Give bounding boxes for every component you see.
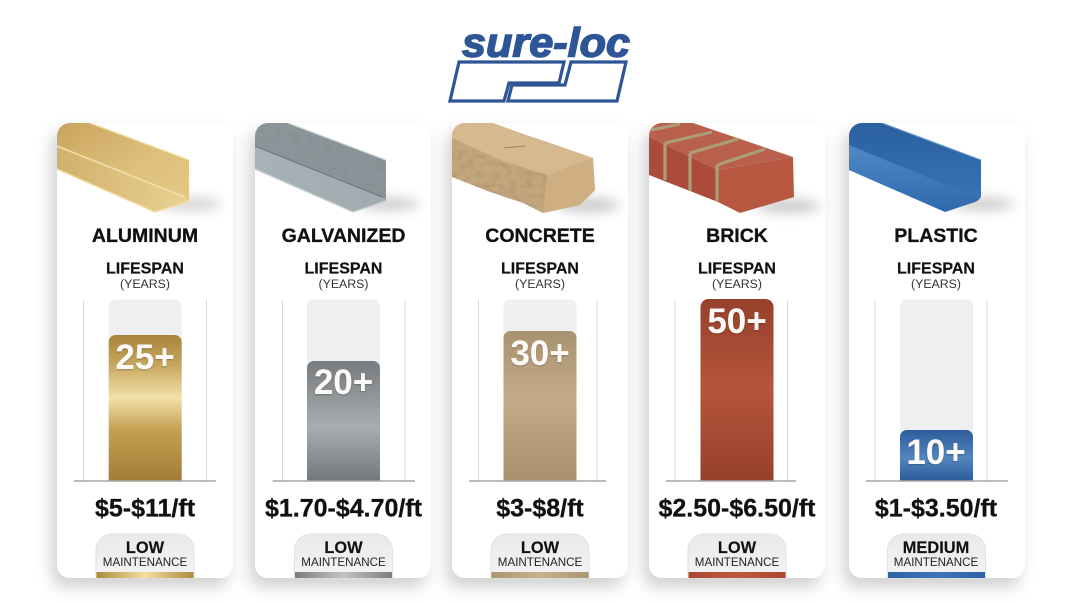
price: $1-$3.50/ft bbox=[875, 494, 998, 522]
maintenance badge: MAINTENANCE bbox=[103, 556, 187, 569]
maintenance badge: MAINTENANCE bbox=[695, 556, 779, 569]
price: $2.50-$6.50/ft bbox=[658, 494, 816, 522]
price: $5-$11/ft bbox=[95, 494, 196, 522]
maintenance badge: MAINTENANCE bbox=[498, 556, 582, 569]
maintenance badge: MAINTENANCE bbox=[301, 556, 386, 569]
lifespan label: LIFESPAN bbox=[501, 260, 579, 278]
logo wordmark: sure-loc bbox=[462, 20, 630, 66]
material name: GALVANIZED bbox=[282, 225, 405, 247]
maintenance badge: MAINTENANCE bbox=[894, 556, 978, 569]
bar chart: 30+ years: 30+ bbox=[510, 334, 570, 373]
lifespan label: (YEARS) bbox=[319, 277, 368, 291]
bar chart: 20+ years bbox=[272, 300, 415, 481]
card background bbox=[57, 123, 233, 578]
maintenance badge bbox=[491, 534, 589, 578]
lifespan label bbox=[305, 260, 382, 291]
lifespan label: (YEARS) bbox=[515, 277, 565, 291]
lifespan label bbox=[897, 260, 975, 291]
material name: PLASTIC bbox=[894, 225, 978, 247]
price: $1.70-$4.70/ft bbox=[265, 494, 423, 522]
card background bbox=[452, 123, 628, 578]
bar chart: 10+ years bbox=[866, 300, 1008, 481]
icon: aluminum angle bbox=[57, 123, 222, 212]
panel: plastic bbox=[849, 123, 1025, 578]
maintenance badge bbox=[888, 534, 986, 578]
logo: sure-loc bbox=[450, 20, 630, 101]
maintenance badge: LOW bbox=[126, 539, 165, 557]
panel: brick bbox=[649, 123, 825, 578]
material name: ALUMINUM bbox=[92, 225, 198, 247]
lifespan label: LIFESPAN bbox=[698, 260, 776, 278]
lifespan label: LIFESPAN bbox=[305, 260, 382, 278]
bar chart: 25+ years bbox=[74, 300, 216, 481]
bar chart: 50+ years bbox=[666, 299, 796, 481]
logo mark bbox=[450, 62, 626, 101]
lifespan label: (YEARS) bbox=[120, 277, 170, 291]
icon: concrete block bbox=[452, 123, 620, 213]
material name: BRICK bbox=[706, 225, 768, 247]
bar chart: 25+ years: 25+ bbox=[115, 338, 175, 377]
lifespan label: LIFESPAN bbox=[106, 260, 184, 278]
bar chart: 50+ years: 50+ bbox=[707, 302, 767, 341]
icon: plastic angle bbox=[849, 123, 1015, 212]
maintenance badge bbox=[688, 534, 786, 578]
price: $3-$8/ft bbox=[496, 494, 584, 522]
panel: aluminum bbox=[57, 123, 233, 578]
maintenance badge bbox=[96, 534, 194, 578]
lifespan label bbox=[106, 260, 184, 291]
panel: galvanized bbox=[255, 123, 431, 578]
maintenance badge: LOW bbox=[324, 539, 363, 557]
material name: CONCRETE bbox=[485, 225, 595, 247]
lifespan label bbox=[501, 260, 579, 291]
icon: galvanized angle bbox=[255, 123, 420, 212]
lifespan label: (YEARS) bbox=[911, 277, 961, 291]
icon: brick bbox=[649, 123, 820, 213]
lifespan label: LIFESPAN bbox=[897, 260, 975, 278]
bar chart: 30+ years bbox=[469, 300, 606, 481]
card background bbox=[649, 123, 825, 578]
maintenance badge: MEDIUM bbox=[903, 539, 969, 557]
bar chart: 20+ years: 20+ bbox=[314, 363, 373, 402]
lifespan label bbox=[698, 260, 776, 291]
card background bbox=[255, 123, 431, 578]
card background bbox=[849, 123, 1025, 578]
lifespan label: (YEARS) bbox=[712, 277, 762, 291]
maintenance badge: LOW bbox=[521, 539, 560, 557]
maintenance badge: LOW bbox=[718, 539, 757, 557]
maintenance badge bbox=[294, 534, 392, 578]
panel: concrete bbox=[452, 123, 628, 578]
bar chart: 10+ years: 10+ bbox=[906, 433, 966, 472]
